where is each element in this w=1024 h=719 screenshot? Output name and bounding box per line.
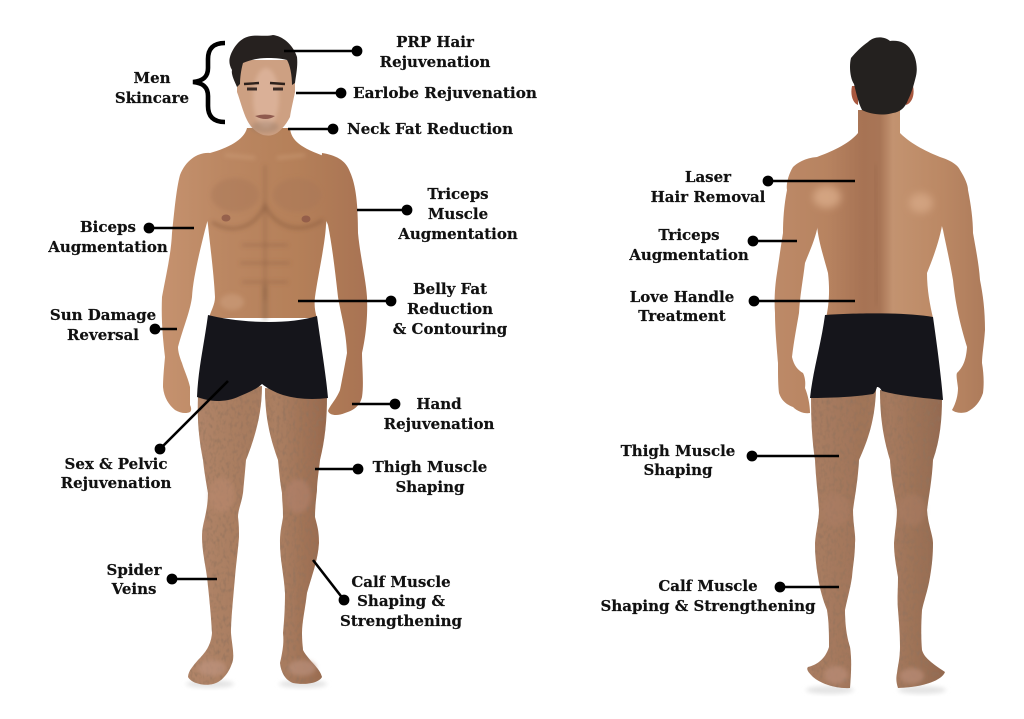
label: Men Skincare: Men (133, 69, 171, 87)
nipples (222, 214, 310, 222)
label: Thigh Muscle Shaping: Thigh Muscle (373, 458, 487, 476)
foot shadows (186, 680, 327, 688)
back hair (850, 37, 917, 114)
label: Calf Muscle Shaping & Strengthening: Shaping & (357, 592, 445, 610)
label: Love Handle Treatment: Treatment (638, 307, 726, 325)
back figure (775, 37, 985, 694)
leader: love handle (749, 296, 855, 306)
leader: thigh back (747, 451, 839, 461)
knees (198, 478, 316, 676)
back torso (812, 110, 945, 318)
back muscle highlights (813, 165, 933, 305)
leader: thigh front (315, 464, 363, 474)
leader: pelvic (155, 381, 228, 454)
label: Belly Fat Reduction & Contouring: Belly Fat (413, 280, 487, 298)
front head (237, 60, 295, 136)
label: Calf Muscle Shaping & Strengthening back: Calf Muscle (658, 577, 758, 595)
leader: triceps front (357, 205, 412, 215)
label: Calf Muscle Shaping & Strengthening: Strengthening (340, 612, 462, 630)
label: Sun Damage Reversal: Sun Damage (50, 306, 156, 324)
label: Spider Veins: Veins (111, 580, 156, 598)
label: Belly Fat Reduction & Contouring: Reduction (407, 300, 493, 318)
leader: calf front (313, 560, 349, 605)
front arms and hands (162, 153, 367, 415)
leader: earlobe (296, 88, 346, 98)
label: Laser Hair Removal: Laser (685, 168, 732, 186)
foot shadows back (806, 686, 946, 694)
label: PRP Hair Rejuvenation: PRP Hair (396, 33, 475, 51)
label: Triceps Muscle Augmentation: Muscle (428, 205, 488, 223)
label: Hand Rejuvenation: Hand (416, 395, 462, 413)
label: Sex & Pelvic Rejuvenation: Sex & Pelvic (65, 455, 167, 473)
shorts back (810, 313, 943, 400)
label: Thigh Muscle Shaping back: Shaping (643, 461, 713, 479)
label: Earlobe Rejuvenation: Earlobe Rejuvenation (353, 84, 537, 102)
back legs (807, 390, 945, 688)
leader: calf back (775, 582, 839, 592)
leader: PRP (284, 46, 362, 56)
leader: hand (352, 399, 400, 409)
label: Hand Rejuvenation: Rejuvenation (384, 415, 494, 433)
label: Sun Damage Reversal: Reversal (67, 326, 139, 344)
front legs (188, 386, 327, 685)
heels (822, 494, 926, 684)
back arms and hands (775, 157, 985, 413)
leader: spider veins (167, 574, 217, 584)
leader: triceps back (748, 236, 797, 246)
label: Triceps Augmentation back: Augmentation (628, 246, 749, 264)
label: Men Skincare: Skincare (115, 89, 189, 107)
label: Calf Muscle Shaping & Strengthening: Calf Muscle (351, 573, 451, 591)
leader lines and dots (144, 46, 855, 605)
label: Love Handle Treatment: Love Handle (630, 288, 734, 306)
back ears (851, 86, 914, 105)
label: Calf Muscle Shaping & Strengthening back: Shaping & Strengthening (600, 597, 816, 615)
front torso (204, 128, 331, 318)
label: Triceps Muscle Augmentation: Triceps (427, 185, 489, 203)
leader: neck (288, 124, 338, 134)
label: Neck Fat Reduction: Neck Fat Reduction (347, 120, 513, 138)
label: Sex & Pelvic Rejuvenation: Rejuvenation (61, 474, 171, 492)
label: Laser Hair Removal: Hair Removal (651, 188, 766, 206)
chest and abdomen shading (211, 155, 323, 320)
leader: laser (763, 176, 855, 186)
label: Biceps Augmentation: Augmentation (47, 238, 168, 256)
leader: biceps (144, 223, 194, 233)
label: PRP Hair Rejuvenation: Rejuvenation (380, 53, 490, 71)
leader: sun damage (150, 324, 177, 334)
label: Thigh Muscle Shaping back: Thigh Muscle (621, 442, 735, 460)
label: Triceps Muscle Augmentation: Augmentation (397, 225, 518, 243)
label: Triceps Augmentation back: Triceps (658, 226, 720, 244)
icon: curly brace (193, 43, 225, 122)
label: Spider Veins: Spider (107, 561, 163, 579)
label: Belly Fat Reduction & Contouring: & Contouring (393, 320, 508, 338)
front figure (162, 35, 367, 688)
shorts front (197, 315, 328, 401)
label: Biceps Augmentation: Biceps (80, 218, 136, 236)
leader: belly (298, 296, 396, 306)
label: Thigh Muscle Shaping: Shaping (395, 478, 465, 496)
front hair (229, 35, 297, 87)
